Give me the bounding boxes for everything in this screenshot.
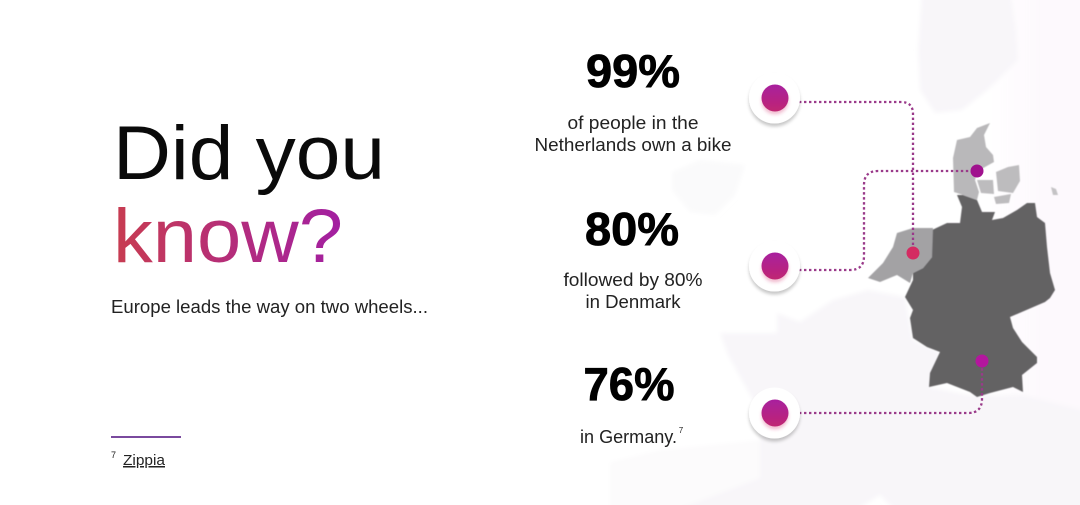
- stat: 80%: [564, 203, 702, 312]
- footnote: 7: [111, 450, 116, 460]
- button: Germany: [749, 388, 800, 438]
- Netherlands: [868, 228, 933, 283]
- stat: 76%: [580, 358, 684, 447]
- line: Netherlands: [789, 102, 913, 253]
- stat: 99%: of people in the: [568, 113, 698, 133]
- stat: 80%: 80%: [585, 203, 679, 255]
- footnote rule: [111, 436, 181, 438]
- stat: 99%: [534, 45, 732, 155]
- stat: 99%: 99%: [586, 45, 680, 97]
- footnote: [111, 450, 166, 469]
- title: Did you: [113, 111, 385, 196]
- stat: 99%: Netherlands own a bike: [534, 135, 732, 155]
- title: [113, 111, 385, 279]
- line: Germany: [789, 361, 982, 413]
- stat: 80%: followed by 80%: [564, 270, 702, 290]
- map marker dots: [906, 164, 988, 368]
- faint map of Europe: [610, 0, 1080, 505]
- title: know?: [113, 194, 343, 279]
- Denmark: [953, 123, 994, 200]
- Germany: [905, 195, 1055, 397]
- stat: 76%: 76%: [584, 358, 674, 410]
- map: Germany and neighbours: [868, 123, 1058, 397]
- stat: 76%: in Germany.: [580, 427, 677, 447]
- subtitle: Europe leads the way on two wheels...: [111, 297, 428, 317]
- stat: 80%: in Denmark: [586, 292, 682, 312]
- footnote: Zippia: [123, 452, 166, 469]
- line: Denmark: [789, 171, 977, 270]
- button: Denmark: [749, 240, 800, 292]
- connector lines: [789, 102, 982, 413]
- stat: 76%: 7: [679, 426, 684, 435]
- button: Netherlands: [749, 72, 800, 124]
